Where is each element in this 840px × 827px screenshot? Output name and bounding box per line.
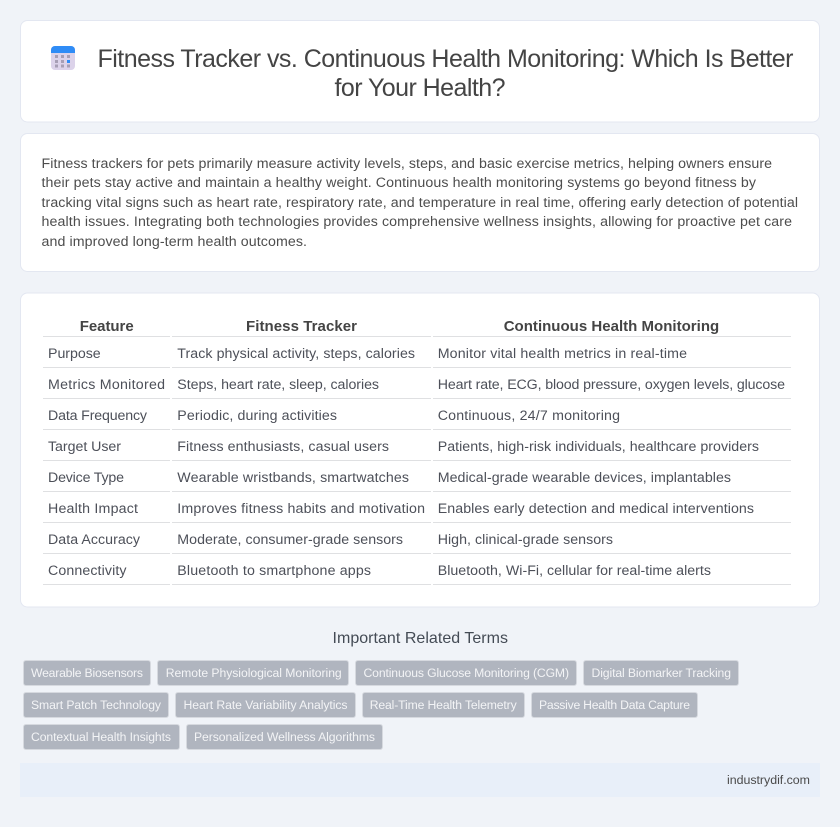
text block: introduction: and improved long-term health outcomes. <box>42 234 307 250</box>
row: Connectivity: Bluetooth, Wi-Fi, cellular for real-time alerts <box>438 563 711 579</box>
title: for Your Health? <box>334 74 506 102</box>
row: Health Impact <box>48 501 754 517</box>
tag: Real-Time Health Telemetry <box>362 692 524 718</box>
tag: Continuous Glucose Monitoring (CGM) <box>356 660 576 686</box>
row: Health Impact: Health Impact <box>48 501 138 517</box>
row: Target User <box>48 439 759 455</box>
row: Connectivity <box>48 563 711 579</box>
tag: Real-Time Health Telemetry: Real-Time Health Telemetry <box>370 698 518 712</box>
row: Target User: Patients, high-risk individuals, healthcare providers <box>438 439 759 455</box>
text block: introduction: health issues. Integrating both technologies provides comprehensive wellness insights, allowing for proactive pet care <box>42 214 792 230</box>
tag: Wearable Biosensors: Wearable Biosensors <box>31 666 143 680</box>
tag: Personalized Wellness Algorithms: Personalized Wellness Algorithms <box>194 730 375 744</box>
text block: introduction: tracking vital signs such as heart rate, respiratory rate, and temperature in real time, offering early detection of potential <box>42 195 798 211</box>
row: Data Accuracy <box>48 532 613 548</box>
row: Data Frequency: Periodic, during activities <box>177 408 337 424</box>
tag: Passive Health Data Capture: Passive Health Data Capture <box>539 698 690 712</box>
tag: Contextual Health Insights <box>24 724 180 750</box>
tag: Smart Patch Technology: Smart Patch Technology <box>31 698 162 712</box>
row: Device Type <box>48 470 731 486</box>
row: Health Impact: Enables early detection and medical interventions <box>438 501 754 517</box>
tag: Remote Physiological Monitoring: Remote Physiological Monitoring <box>166 666 342 680</box>
panel: comparison table <box>20 293 820 607</box>
row: Data Accuracy: Moderate, consumer-grade sensors <box>177 532 403 548</box>
tag: Heart Rate Variability Analytics <box>176 692 356 718</box>
row: Health Impact: Improves fitness habits and motivation <box>177 501 425 517</box>
row: Purpose: Monitor vital health metrics in real-time <box>438 346 687 362</box>
row: Data Frequency: Continuous, 24/7 monitoring <box>438 408 620 424</box>
tag: Continuous Glucose Monitoring (CGM): Continuous Glucose Monitoring (CGM) <box>364 666 569 680</box>
row: Target User: Target User <box>48 439 121 455</box>
row: Metrics Monitored: Metrics Monitored <box>48 377 165 393</box>
row: Purpose: Purpose <box>48 346 101 362</box>
table header row: Continuous Health Monitoring <box>504 318 719 335</box>
tag: Heart Rate Variability Analytics: Heart Rate Variability Analytics <box>184 698 348 712</box>
row: Data Frequency: Data Frequency <box>48 408 148 424</box>
row: Connectivity: Bluetooth to smartphone apps <box>177 563 371 579</box>
table header row: Fitness Tracker <box>246 318 357 335</box>
table header row <box>80 318 719 335</box>
row: Device Type: Medical-grade wearable devices, implantables <box>438 470 731 486</box>
row: Data Accuracy: Data Accuracy <box>48 532 141 548</box>
title <box>98 45 794 102</box>
row: Data Accuracy: High, clinical-grade sensors <box>438 532 613 548</box>
text block: introduction <box>42 156 798 250</box>
row: Metrics Monitored: Heart rate, ECG, blood pressure, oxygen levels, glucose <box>438 377 785 393</box>
text block: introduction: Fitness trackers for pets primarily measure activity levels, steps, and basic exercise metrics, helping owners ensure <box>42 156 772 172</box>
footer: industrydif.com <box>727 773 810 787</box>
row: Data Frequency <box>48 408 620 424</box>
tag: Personalized Wellness Algorithms <box>186 724 382 750</box>
footer <box>20 763 820 797</box>
row: Metrics Monitored: Steps, heart rate, sleep, calories <box>177 377 379 393</box>
panel: related term tags <box>24 660 738 750</box>
heading: related terms: Important Related Terms <box>332 630 508 647</box>
row: Device Type: Wearable wristbands, smartwatches <box>177 470 409 486</box>
row: Target User: Fitness enthusiasts, casual users <box>177 439 389 455</box>
row: Device Type: Device Type <box>48 470 124 486</box>
row: Connectivity: Connectivity <box>48 563 127 579</box>
tag: Digital Biomarker Tracking <box>584 660 738 686</box>
tag: Remote Physiological Monitoring <box>158 660 348 686</box>
tag: Smart Patch Technology <box>24 692 168 718</box>
tag: Wearable Biosensors <box>24 660 150 686</box>
row: Purpose <box>48 346 687 362</box>
panel: introduction paragraph <box>20 134 820 272</box>
tag: Contextual Health Insights: Contextual Health Insights <box>31 730 171 744</box>
title: Fitness Tracker vs. Continuous Health Monitoring: Which Is Better <box>98 45 794 73</box>
row: Purpose: Track physical activity, steps, calories <box>177 346 415 362</box>
table header row: Feature <box>80 318 134 335</box>
tag: Passive Health Data Capture <box>532 692 698 718</box>
panel: title header <box>20 20 820 122</box>
tag: Digital Biomarker Tracking: Digital Biomarker Tracking <box>592 666 731 680</box>
row: Metrics Monitored <box>48 377 785 393</box>
icon: calendar <box>51 46 75 70</box>
text block: introduction: their pets stay active and maintain a healthy weight. Continuous health monitoring systems go beyond fitness by <box>42 175 757 191</box>
